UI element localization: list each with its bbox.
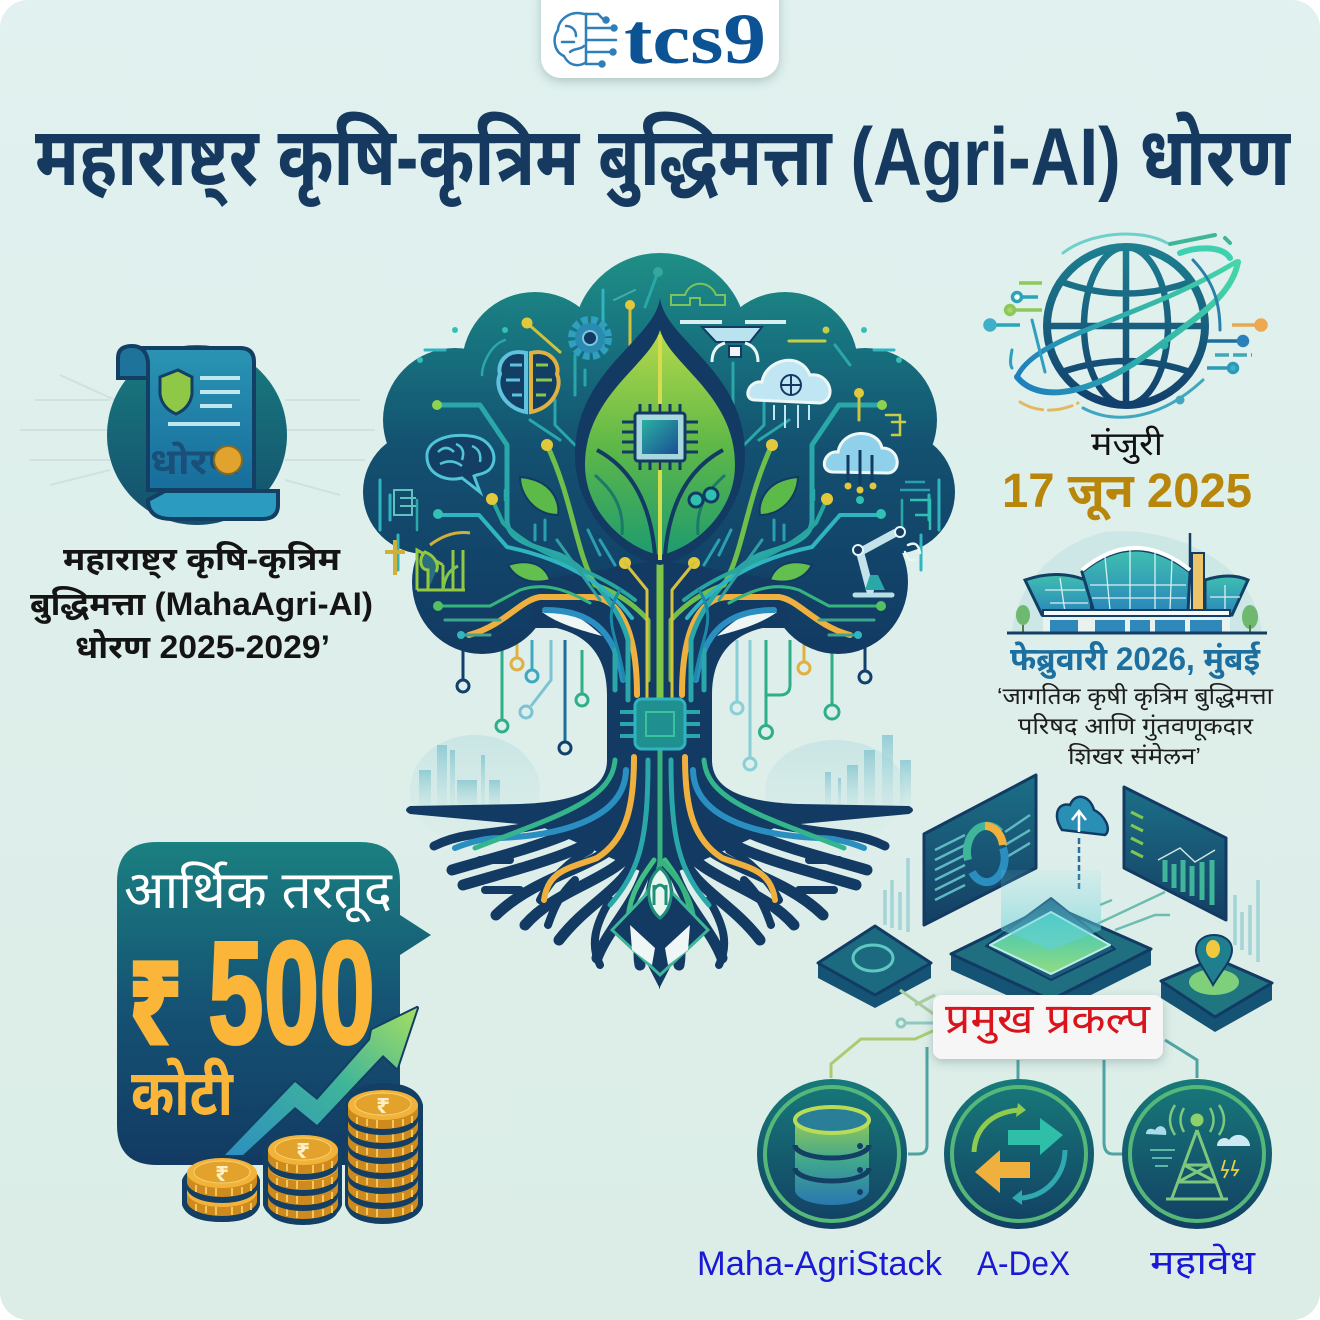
small leaves: [508, 477, 812, 582]
icon: conference building: [1007, 531, 1267, 633]
logo wordmark: tcs9: [624, 0, 766, 79]
hub device: [951, 870, 1151, 1015]
icon: side circuits right: [856, 482, 930, 530]
icon: database: [757, 1079, 907, 1229]
approval date: 17 जून 2025: [1002, 465, 1252, 521]
coins: ₹: [296, 1137, 310, 1164]
connector lines: [831, 990, 1197, 1154]
circuit links: [1095, 892, 1170, 930]
logo tab: [541, 0, 779, 79]
event date: फेब्रुवारी 2026, मुंबई: [1010, 641, 1261, 679]
label: key projects: प्रमुख प्रकल्प: [945, 995, 1151, 1044]
icon: robot arm: [853, 527, 920, 595]
icon: policy document: [20, 345, 375, 525]
icon: brain top: [498, 352, 559, 412]
arrow: [225, 1008, 417, 1155]
approval label: मंजुरी: [1091, 425, 1165, 464]
map pin device: [1161, 935, 1272, 1032]
panel: financial provision: [117, 842, 431, 1225]
icon: outline cloud top: [671, 284, 725, 305]
labels: project names: महावेध: [1150, 1243, 1256, 1282]
text block: policy name: महाराष्ट्र कृषि-कृत्रिम: [63, 541, 341, 579]
crown circuits right: [733, 326, 905, 435]
labels: project names: A-DeX: [977, 1245, 1070, 1283]
orbit rings: [1010, 234, 1238, 417]
skyline left: [410, 735, 540, 845]
icon: cloud with arrows: [824, 433, 897, 494]
icon: brain left: [427, 435, 494, 492]
labels: project names: [697, 1243, 1256, 1283]
icon: greenhouse: [385, 532, 470, 590]
icon: gear: [573, 321, 607, 355]
central trunk: [612, 560, 708, 975]
text block: policy name: धोरण 2025-2029’: [75, 629, 330, 665]
label: key projects: [933, 995, 1163, 1059]
amount: 500: [208, 911, 375, 1074]
tree branches and roots left: [380, 327, 660, 989]
panel: key projects: [697, 775, 1272, 1283]
dashboard screen left: [924, 775, 1036, 925]
tree: [363, 253, 955, 989]
text block: policy name: बुद्धिमत्ता (MahaAgri-AI): [30, 586, 373, 624]
cloud upload: [1057, 797, 1108, 890]
icon: weather tower: [1122, 1079, 1272, 1229]
coins: [182, 1083, 423, 1225]
icon: policy document: धोरण: [150, 441, 241, 482]
event description: [997, 683, 1274, 769]
skyline right: [765, 735, 911, 840]
event description: परिषद आणि गुंतवणूकदार: [1018, 713, 1254, 741]
coins: ₹: [215, 1160, 229, 1187]
amount: [128, 911, 375, 1074]
labels: project names: Maha-AgriStack: [697, 1245, 943, 1283]
crown circuits left: [482, 267, 663, 395]
heading: financial provision: आर्थिक तरतूद: [124, 861, 393, 923]
amount: ₹: [128, 925, 182, 1072]
event description: ‘जागतिक कृषी कृत्रिम बुद्धिमत्ता: [997, 683, 1274, 711]
data nodes: [985, 283, 1266, 372]
root chip: [620, 699, 700, 749]
icon: drone: [680, 322, 786, 362]
coins: ₹: [376, 1092, 390, 1119]
central leaf: [575, 298, 745, 565]
hanging circuit connectors: [457, 640, 871, 770]
text block: policy name: [30, 541, 373, 665]
dashboard screen right: [1124, 787, 1226, 920]
icon: cloud with globe: [748, 360, 830, 428]
icon: globe: [985, 234, 1266, 417]
left device: [818, 926, 931, 1008]
icon: logo brain: [555, 13, 616, 66]
chip: [622, 404, 698, 470]
icon: document lines: [394, 490, 416, 515]
tree branches and roots right: [659, 327, 939, 989]
unit: कोटी: [131, 1057, 234, 1129]
icon: data exchange: [944, 1079, 1094, 1229]
event description: शिखर संमेलन’: [1068, 743, 1201, 769]
data tech pale bars: [885, 858, 1258, 962]
canopy: [363, 253, 955, 654]
